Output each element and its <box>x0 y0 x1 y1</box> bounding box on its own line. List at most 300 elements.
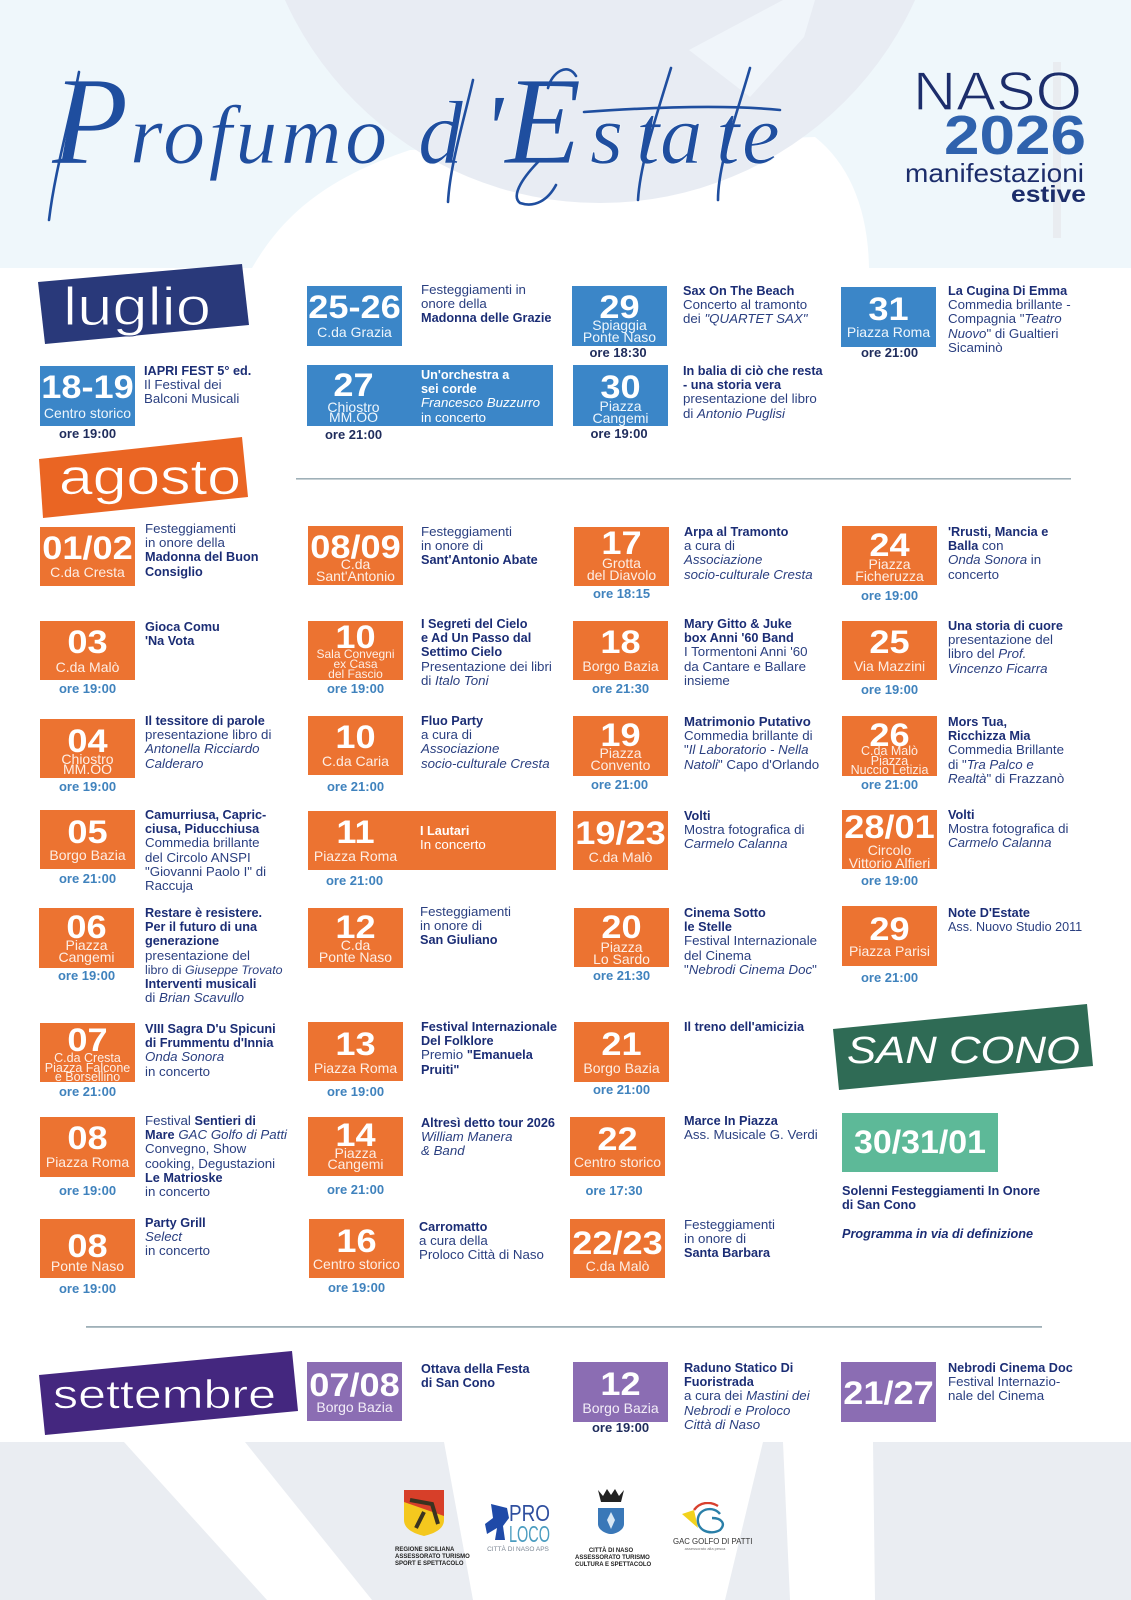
event 12 agosto: Ponte Naso <box>319 949 392 965</box>
event 24 agosto: concerto <box>948 567 999 582</box>
event 24 agosto: Piazza <box>868 556 911 572</box>
event 12 settembre: Città di Naso <box>684 1417 760 1432</box>
event 20 agosto: Lo Sardo <box>593 951 650 967</box>
event 08/09 agosto: 08/09 <box>310 529 401 565</box>
event 29 luglio: Sax On The Beach <box>683 284 794 298</box>
event 10 Sala Convegni: di Italo Toni <box>421 673 489 688</box>
event 22/23 agosto: C.da Malò <box>586 1258 649 1274</box>
event 04 agosto <box>40 714 271 794</box>
event 27 luglio: sei corde <box>421 382 477 396</box>
event 27 luglio: ore 21:00 <box>325 427 382 442</box>
event 29 luglio: ore 18:30 <box>589 345 647 360</box>
event 30 luglio: presentazione del libro <box>683 391 817 406</box>
event 30 luglio: - una storia vera <box>683 378 781 392</box>
banner: settembre <box>39 1351 298 1435</box>
event 18-19 luglio: Centro storico <box>44 405 131 421</box>
event 08 Ponte Naso: Party Grill <box>145 1216 206 1230</box>
event 22 agosto: 22 <box>597 1121 638 1157</box>
event 20 agosto <box>574 906 817 983</box>
event 06 agosto: Restare è resistere. <box>145 906 262 920</box>
event 30 luglio: Cangemi <box>592 410 649 426</box>
banner: luglio: luglio <box>63 277 211 337</box>
event 29 agosto: ore 21:00 <box>861 970 918 985</box>
event 27 luglio: Francesco Buzzurro <box>421 395 540 410</box>
event 22/23 agosto: Festeggiamenti <box>684 1217 775 1232</box>
event 25 agosto: Via Mazzini <box>854 658 925 674</box>
event 14 agosto: ore 21:00 <box>327 1182 384 1197</box>
event 17 agosto <box>574 525 813 601</box>
event 14 agosto: & Band <box>421 1143 465 1158</box>
event 29 luglio <box>572 284 808 360</box>
event 05 agosto: del Circolo ANSPI <box>145 850 251 865</box>
event 13 agosto: Piazza Roma <box>314 1060 397 1076</box>
event 29 agosto: Note D'Estate <box>948 906 1030 920</box>
event 12 agosto: San Giuliano <box>420 933 498 947</box>
event 07/08 settembre: di San Cono <box>421 1376 495 1390</box>
event 21/27 settembre <box>841 1361 1073 1422</box>
event 22 agosto: Centro storico <box>574 1154 661 1170</box>
event 04 agosto: Il tessitore di parole <box>145 714 265 728</box>
event 01/02 agosto: Madonna del Buon <box>145 550 258 564</box>
event 01/02 agosto: 01/02 <box>42 530 133 566</box>
event 12 settembre: a cura dei Mastini dei <box>684 1388 810 1403</box>
event 18 agosto: Mary Gitto & Juke <box>684 617 792 631</box>
event 18 agosto: ore 21:30 <box>592 681 649 696</box>
event 20 agosto: "Nebrodi Cinema Doc" <box>684 962 817 977</box>
event 05 agosto: Raccuja <box>145 878 193 893</box>
event 13 agosto: 13 <box>335 1026 376 1062</box>
event 28/01 agosto: 28/01 <box>844 810 935 845</box>
event 29 agosto <box>842 906 1082 985</box>
event 04 agosto: ore 19:00 <box>59 779 116 794</box>
event 06 agosto: Piazza <box>65 937 108 953</box>
event 01/02 agosto: Consiglio <box>145 565 203 579</box>
event 17 agosto: ore 18:15 <box>593 586 650 601</box>
event 28/01 agosto: Mostra fotografica di <box>948 821 1068 836</box>
event 06 agosto: 06 <box>66 909 107 945</box>
event 31 luglio: Compagnia "Teatro <box>948 311 1062 326</box>
event 03 agosto: ore 19:00 <box>59 681 116 696</box>
event 19 agosto: Matrimonio Putativo <box>684 714 811 729</box>
event 27 luglio <box>307 365 553 442</box>
event 30 luglio: Piazza <box>599 398 642 414</box>
event 31 luglio <box>841 284 1071 360</box>
event 25 agosto: 25 <box>869 624 910 660</box>
banner: San Cono <box>833 1004 1093 1090</box>
event 08 Piazza Roma: Mare GAC Golfo di Patti <box>145 1127 287 1142</box>
event 07 agosto: Onda Sonora <box>145 1049 224 1064</box>
title: Profumo d'Estate: d <box>418 84 464 183</box>
event 24 agosto: Ficheruzza <box>855 568 924 584</box>
event 06 agosto: Per il futuro di una <box>145 920 257 934</box>
event 07/08 settembre: Borgo Bazia <box>316 1399 393 1415</box>
event 06 agosto: generazione <box>145 934 219 948</box>
event 14 agosto: Altresì detto tour 2026 <box>421 1116 555 1130</box>
event 11 agosto <box>308 811 556 888</box>
banner: settembre: settembre <box>53 1373 276 1417</box>
event 08 Piazza Roma: ore 19:00 <box>59 1183 116 1198</box>
event 24 agosto: Onda Sonora in <box>948 552 1041 567</box>
event 17 agosto: a cura di <box>684 538 735 553</box>
event 31 luglio: Piazza Roma <box>847 324 930 340</box>
event 20 agosto: Piazza <box>600 939 643 955</box>
event 08 Piazza Roma <box>40 1113 288 1199</box>
event 07 agosto: C.da Cresta <box>54 1051 121 1065</box>
event 26 agosto: Realtà" di Frazzanò <box>948 771 1064 786</box>
event 10 Sala Convegni: Sala Convegni <box>316 647 395 661</box>
event 08 Piazza Roma: Convegno, Show <box>145 1141 246 1156</box>
event 08 Piazza Roma: in concerto <box>145 1184 210 1199</box>
event 24 agosto <box>842 525 1048 603</box>
event 25-26 luglio: C.da Grazia <box>317 324 392 340</box>
event 22/23 agosto <box>570 1217 775 1278</box>
event 26 agosto: Mors Tua, <box>948 715 1007 729</box>
event 18-19 luglio: 18-19 <box>41 369 134 405</box>
event 14 agosto: Piazza <box>334 1145 377 1161</box>
event 20 agosto: Festival Internazionale <box>684 933 817 948</box>
event 05 agosto: 05 <box>67 814 108 850</box>
event 17 agosto: Associazione <box>684 552 762 567</box>
event 27 luglio: Chiostro <box>327 399 380 415</box>
event 12 agosto <box>308 904 511 968</box>
event 03 agosto: C.da Malò <box>56 659 119 675</box>
event 16 agosto: Carromatto <box>419 1220 487 1234</box>
event 19/23 agosto <box>573 809 804 870</box>
event 22/23 agosto: 22/23 <box>572 1225 663 1261</box>
event 21/27 settembre: Nebrodi Cinema Doc <box>948 1361 1073 1375</box>
event 10 C.da Caria: C.da Caria <box>322 753 389 769</box>
event 18 agosto: box Anni '60 Band <box>684 631 794 645</box>
logo: Città di Naso: CITTÀ DI NASO <box>589 1548 633 1554</box>
event 17 agosto: del Diavolo <box>587 567 656 583</box>
event 16 agosto: Proloco Città di Naso <box>419 1247 544 1262</box>
title: Profumo d'Estate: E <box>503 53 581 191</box>
event 21/27 settembre: nale del Cinema <box>948 1388 1044 1403</box>
event 13 agosto: ore 19:00 <box>327 1084 384 1099</box>
event 06 agosto: ore 19:00 <box>58 968 115 983</box>
event 29 luglio: Concerto al tramonto <box>683 297 807 312</box>
event 10 Sala Convegni: Presentazione dei libri <box>421 659 552 674</box>
event 27 luglio: in concerto <box>421 410 486 425</box>
logo: Regione Siciliana: ASSESSORATO TURISMO <box>395 1554 470 1560</box>
event 19 agosto: ore 21:00 <box>591 777 648 792</box>
event 18-19 luglio: Balconi Musicali <box>144 391 239 406</box>
event 25-26 luglio: Madonna delle Grazie <box>421 311 551 325</box>
event 12 agosto: in onore di <box>420 918 482 933</box>
event 12 settembre <box>573 1361 810 1435</box>
event 19/23 agosto: Mostra fotografica di <box>684 822 804 837</box>
event 18-19 luglio: IAPRI FEST 5° ed. <box>144 364 251 378</box>
event 27 luglio: Un'orchestra a <box>421 368 509 382</box>
event 10 C.da Caria: a cura di <box>421 727 472 742</box>
event 08/09 agosto: Sant'Antonio <box>316 568 395 584</box>
event 03 agosto: 03 <box>67 624 108 660</box>
event 07/08 settembre: Ottava della Festa <box>421 1362 530 1376</box>
event 07 agosto: VIII Sagra D'u Spicuni <box>145 1022 276 1036</box>
event 12 settembre: Fuoristrada <box>684 1375 754 1389</box>
event 30/31/01 San Cono: di San Cono <box>842 1198 916 1212</box>
event 29 agosto: 29 <box>869 911 910 947</box>
event 18 agosto: I Tormentoni Anni '60 <box>684 644 808 659</box>
event 16 agosto: 16 <box>336 1223 377 1259</box>
event 26 agosto: di "Tra Palco e <box>948 757 1034 772</box>
event 18 agosto: 18 <box>600 624 641 660</box>
event 04 agosto: MM.OO <box>63 761 112 777</box>
event 17 agosto: Grotta <box>602 555 641 571</box>
event 16 agosto: a cura della <box>419 1233 488 1248</box>
banner: San Cono: SAN CONO <box>847 1030 1080 1072</box>
event 19 agosto <box>573 714 819 792</box>
logo: GAC Golfo di Patti: GAC GOLFO DI PATTI <box>673 1537 752 1546</box>
event 21 agosto <box>574 1020 804 1097</box>
event 21 agosto: 21 <box>601 1026 642 1062</box>
event 07 agosto: Piazza Falcone <box>45 1061 130 1075</box>
event 26 agosto <box>842 715 1064 792</box>
event 10 Sala Convegni: ex Casa <box>333 657 378 671</box>
event 20 agosto: del Cinema <box>684 948 751 963</box>
event 29 luglio: 29 <box>599 289 640 325</box>
event 25-26 luglio: 25-26 <box>308 289 401 325</box>
event 11 agosto: Piazza Roma <box>314 848 397 864</box>
logo: GAC Golfo di Patti: assessorato alla pesca <box>685 1546 725 1551</box>
event 31 luglio: 31 <box>868 291 909 327</box>
event 08 Ponte Naso: 08 <box>67 1228 108 1264</box>
event 01/02 agosto <box>40 521 258 586</box>
logo: Regione Siciliana: SPORT E SPETTACOLO <box>395 1561 464 1567</box>
logo text: NASO 2026 manifestazioni estive: estive <box>1011 181 1086 207</box>
logo: Città di Naso: CULTURA E SPETTACOLO <box>575 1562 651 1568</box>
event 28/01 agosto: ore 19:00 <box>861 873 918 888</box>
event 04 agosto: Calderaro <box>145 756 203 771</box>
event 22 agosto: Ass. Musicale G. Verdi <box>684 1127 818 1142</box>
event 18 agosto <box>573 617 808 696</box>
event 07 agosto <box>40 1022 276 1099</box>
event 19/23 agosto: 19/23 <box>575 815 666 851</box>
event 22 agosto: Marce In Piazza <box>684 1114 778 1128</box>
event 08/09 agosto: in onore di <box>421 538 483 553</box>
logo: Città di Naso: ASSESSORATO TURISMO <box>575 1555 650 1561</box>
event 06 agosto <box>39 906 283 1005</box>
event 11 agosto: 11 <box>336 814 375 850</box>
event 07 agosto: in concerto <box>145 1064 210 1079</box>
event 18-19 luglio: ore 19:00 <box>59 426 116 441</box>
event 07/08 settembre <box>307 1362 530 1421</box>
event 10 Sala Convegni <box>308 617 552 696</box>
title: Profumo d'Estate: ' <box>482 74 528 185</box>
event 25 agosto: libro del Prof. <box>948 646 1026 661</box>
event 25 agosto: Una storia di cuore <box>948 619 1063 633</box>
event 19 agosto: Convento <box>591 757 650 773</box>
event 05 agosto: Camurriusa, Capric- <box>145 808 266 822</box>
event 28/01 agosto: Circolo <box>868 842 911 858</box>
event 20 agosto: ore 21:30 <box>593 968 650 983</box>
event 08 Ponte Naso: Ponte Naso <box>51 1258 124 1274</box>
event 18-19 luglio <box>40 364 251 441</box>
event 26 agosto: Commedia Brillante <box>948 742 1064 757</box>
event 07 agosto: 07 <box>67 1023 108 1058</box>
event 30 luglio: di Antonio Puglisi <box>683 406 785 421</box>
event 27 luglio: MM.OO <box>329 409 378 425</box>
title: Profumo d'Estate: state <box>590 88 780 182</box>
event 17 agosto: Arpa al Tramonto <box>684 525 788 539</box>
event 13 agosto: Del Folklore <box>421 1034 494 1048</box>
event 14 agosto: 14 <box>335 1117 376 1153</box>
event 25-26 luglio: onore della <box>421 296 487 311</box>
event 04 agosto: presentazione libro di <box>145 727 271 742</box>
logo: Pro Loco <box>485 1504 551 1556</box>
event 13 agosto: Premio "Emanuela <box>421 1047 533 1062</box>
event 07/08 settembre: 07/08 <box>309 1367 400 1403</box>
event 12 settembre: 12 <box>600 1366 641 1402</box>
event 08 Ponte Naso: ore 19:00 <box>59 1281 116 1296</box>
event 30/31/01 San Cono: Solenni Festeggiamenti In Onore <box>842 1184 1040 1198</box>
event 06 agosto: Interventi musicali <box>145 977 256 991</box>
event 21 agosto: Borgo Bazia <box>583 1060 660 1076</box>
event 06 agosto: libro di Giuseppe Trovato <box>145 963 283 977</box>
event 08/09 agosto: Sant'Antonio Abate <box>421 553 538 567</box>
event 30 luglio: In balia di ciò che resta <box>683 364 823 378</box>
event 25-26 luglio: Festeggiamenti in <box>421 282 526 297</box>
event 28/01 agosto <box>842 808 1068 888</box>
event 29 agosto: Ass. Nuovo Studio 2011 <box>948 920 1082 934</box>
event 16 agosto: ore 19:00 <box>328 1280 385 1295</box>
event 26 agosto: C.da Malò <box>861 744 918 758</box>
event 30 luglio: 30 <box>600 369 641 405</box>
event 08 Piazza Roma: cooking, Degustazioni <box>145 1156 275 1171</box>
event 12 settembre: Raduno Statico Di <box>684 1361 793 1375</box>
event 22/23 agosto: Santa Barbara <box>684 1246 770 1260</box>
event 18-19 luglio: Il Festival dei <box>144 377 222 392</box>
event 26 agosto: 26 <box>869 717 910 753</box>
event 21 agosto: Il treno dell'amicizia <box>684 1020 804 1034</box>
logo: Pro Loco: CITTÀ DI NASO APS <box>487 1546 549 1553</box>
event 10 C.da Caria: Fluo Party <box>421 714 483 728</box>
event 10 Sala Convegni: e Ad Un Passo dal <box>421 631 531 645</box>
event 18 agosto: insieme <box>684 673 730 688</box>
event 19 agosto: Piazza <box>599 745 642 761</box>
logos row <box>395 1489 752 1568</box>
event 11 agosto: In concerto <box>420 837 486 852</box>
event 24 agosto: 24 <box>869 527 910 563</box>
event 07 agosto: ore 21:00 <box>59 1084 116 1099</box>
event 25 agosto: Vincenzo Ficarra <box>948 661 1048 676</box>
event 19/23 agosto: Carmelo Calanna <box>684 836 787 851</box>
event 03 agosto <box>40 620 220 696</box>
banner: agosto <box>39 437 248 518</box>
event 12 agosto: C.da <box>341 937 370 953</box>
logo: Città di Naso <box>575 1488 647 1568</box>
banner: agosto: agosto <box>59 449 241 505</box>
event 21/27 settembre: 21/27 <box>843 1375 934 1411</box>
title: Profumo d'Estate: P <box>51 53 128 191</box>
logo text: NASO 2026 manifestazioni estive: NASO <box>913 60 1082 122</box>
event 20 agosto: 20 <box>601 909 642 945</box>
event 31 luglio: Commedia brillante - <box>948 297 1071 312</box>
event 30/31/01 San Cono: 30/31/01 <box>854 1124 986 1160</box>
event 08 Ponte Naso: Select <box>145 1229 182 1244</box>
event 16 agosto <box>309 1219 544 1295</box>
event 21/27 settembre: Festival Internazio- <box>948 1374 1060 1389</box>
event 25 agosto <box>842 619 1063 697</box>
event 29 agosto: Piazza Parisi <box>849 943 930 959</box>
event 06 agosto: presentazione del <box>145 948 250 963</box>
event 01/02 agosto: Festeggiamenti <box>145 521 236 536</box>
logo: Regione Siciliana <box>395 1490 461 1565</box>
event 12 settembre: ore 19:00 <box>592 1420 649 1435</box>
event 08 Ponte Naso: in concerto <box>145 1243 210 1258</box>
logo: Regione Siciliana: REGIONE SICILIANA <box>395 1547 454 1553</box>
logo text: NASO 2026 manifestazioni estive: manifestazioni <box>905 158 1084 188</box>
event 10 C.da Caria: Associazione <box>421 741 499 756</box>
event 11 agosto: ore 21:00 <box>326 873 383 888</box>
event 19/23 agosto: Volti <box>684 809 711 823</box>
event 31 luglio: Sicaminò <box>948 340 1003 355</box>
event 10 C.da Caria: 10 <box>335 719 376 755</box>
event 12 settembre: Nebrodi e Proloco <box>684 1403 790 1418</box>
event 13 agosto <box>308 1020 557 1099</box>
event 16 agosto: Centro storico <box>313 1256 400 1272</box>
event 13 agosto: Pruiti" <box>421 1063 459 1077</box>
event 05 agosto <box>40 808 266 893</box>
event 05 agosto: Commedia brillante <box>145 835 260 850</box>
event 10 Sala Convegni: Settimo Cielo <box>421 645 502 659</box>
event 26 agosto: Ricchizza Mia <box>948 729 1030 743</box>
event 25 agosto: presentazione del <box>948 632 1053 647</box>
event 26 agosto: ore 21:00 <box>861 777 918 792</box>
event 12 agosto: Festeggiamenti <box>420 904 511 919</box>
event 17 agosto: socio-culturale Cresta <box>684 567 813 582</box>
event 28/01 agosto: Volti <box>948 808 975 822</box>
event 19 agosto: Natoli" Capo d'Orlando <box>684 757 819 772</box>
event 30/31/01 San Cono: Programma in via di definizione <box>842 1227 1033 1241</box>
event 05 agosto: Borgo Bazia <box>49 847 126 863</box>
event 18 agosto: Borgo Bazia <box>582 658 659 674</box>
event 08/09 agosto: C.da <box>341 556 370 572</box>
event 05 agosto: ciusa, Piducchiusa <box>145 822 259 836</box>
event 03 agosto: 'Na Vota <box>145 634 194 648</box>
event 19/23 agosto: C.da Malò <box>589 849 652 865</box>
logo: GAC Golfo di Patti <box>673 1502 737 1552</box>
event 19 agosto: 19 <box>600 717 641 753</box>
event 10 C.da Caria <box>308 714 550 794</box>
event 06 agosto: di Brian Scavullo <box>145 990 244 1005</box>
event 14 agosto: William Manera <box>421 1129 513 1144</box>
event 22/23 agosto: in onore di <box>684 1231 746 1246</box>
event 04 agosto: Antonella Ricciardo <box>145 741 260 756</box>
event 10 C.da Caria: socio-culturale Cresta <box>421 756 550 771</box>
event 14 agosto <box>308 1116 555 1197</box>
event 08/09 agosto: Festeggiamenti <box>421 524 512 539</box>
event 24 agosto: ore 19:00 <box>861 588 918 603</box>
event 14 agosto: Cangemi <box>327 1156 384 1172</box>
event 04 agosto: 04 <box>67 723 108 759</box>
event 21 agosto: ore 21:00 <box>593 1082 650 1097</box>
event 29 luglio: Spiaggia <box>592 317 647 333</box>
event 30 luglio <box>573 364 823 441</box>
event 31 luglio: Nuovo" di Gualtieri <box>948 326 1058 341</box>
event 08 Ponte Naso <box>40 1216 210 1296</box>
event 08/09 agosto <box>308 524 538 585</box>
event 30 luglio: ore 19:00 <box>590 426 648 441</box>
event 24 agosto: 'Rrusti, Mancia e <box>948 525 1048 539</box>
event 08 Piazza Roma: Piazza Roma <box>46 1154 129 1170</box>
event 13 agosto: Festival Internazionale <box>421 1020 557 1034</box>
event 07 agosto: di Frummentu d'Innia <box>145 1036 273 1050</box>
event 08 Piazza Roma: Festival Sentieri di <box>145 1113 256 1128</box>
event 20 agosto: Cinema Sotto <box>684 906 766 920</box>
event 12 agosto: 12 <box>335 909 376 945</box>
banner: luglio <box>38 264 249 344</box>
